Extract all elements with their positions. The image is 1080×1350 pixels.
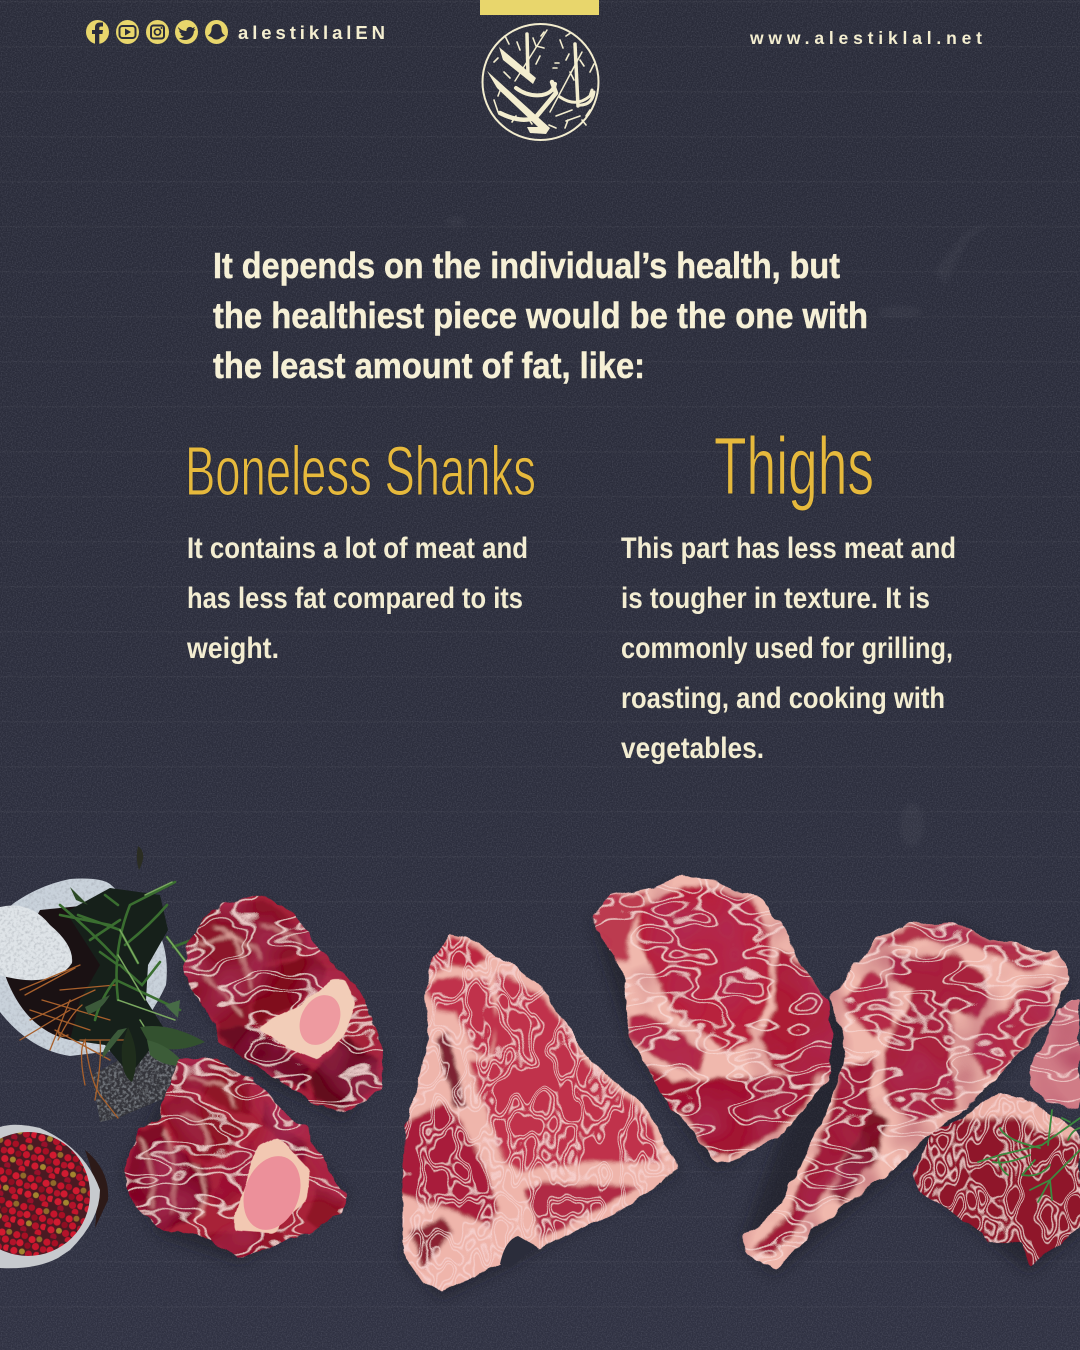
- icon: twitter: [175, 20, 198, 44]
- icon: instagram: [146, 20, 169, 44]
- social media icons: [86, 20, 228, 44]
- text block: boneless shanks description: It contains a lot of meat and: [187, 532, 528, 565]
- accent bar at top: [480, 0, 599, 15]
- photo: upper osso buco shank: [183, 895, 384, 1115]
- text block: boneless shanks description: weight.: [186, 632, 279, 665]
- text block: thighs description: is tougher in texture. It is: [621, 582, 930, 615]
- text block: boneless shanks description: [186, 532, 528, 665]
- marrow: [292, 988, 348, 1052]
- icon: snapchat: [205, 20, 228, 44]
- photo: t-bone steak: [403, 933, 679, 1293]
- intro heading: the healthiest piece would be the one with: [213, 295, 868, 336]
- photo: front steak at right edge: [912, 1092, 1080, 1267]
- heading: Boneless Shanks: Boneless Shanks: [185, 432, 536, 510]
- photo: pink peppercorn bowl: [0, 1125, 108, 1268]
- photo: sage leaves: [70, 846, 205, 1082]
- photo: mortar with pestle: [0, 879, 178, 1122]
- photo: tomahawk steak: [741, 922, 1070, 1270]
- pestle: [0, 905, 72, 980]
- intro heading: It depends on the individual’s health, but: [213, 245, 840, 286]
- heading: Thighs: Thighs: [714, 421, 874, 512]
- intro heading: the least amount of fat, like:: [213, 345, 645, 386]
- mortar bowl: [0, 879, 167, 1056]
- text block: thighs description: [621, 532, 956, 765]
- notch in bone: [500, 1236, 535, 1268]
- bone ring: [258, 980, 356, 1060]
- text block: boneless shanks description: has less fat compared to its: [187, 582, 523, 615]
- photo: herb sprigs: [20, 882, 205, 1118]
- logo emblem: [482, 24, 598, 140]
- social handle: alestiklalEN: [238, 22, 385, 43]
- text block: thighs description: This part has less meat and: [621, 532, 956, 565]
- website address: www.alestiklal.net: [749, 28, 982, 48]
- bone ring: [234, 1137, 310, 1233]
- photo: meat shadows: [124, 882, 1080, 1298]
- icon: facebook: [86, 20, 109, 44]
- photo: ribeye steak: [593, 877, 833, 1163]
- dark stone base: [92, 1045, 178, 1122]
- text block: thighs description: vegetables.: [621, 732, 764, 765]
- peppercorns: [0, 1132, 90, 1256]
- photo: rosemary sprig on steak: [978, 1110, 1080, 1202]
- photo: lower osso buco shank: [124, 1057, 348, 1257]
- text block: thighs description: roasting, and cooking with: [621, 682, 945, 715]
- marrow: [234, 1148, 310, 1238]
- photo: back steak at right edge: [1032, 997, 1080, 1110]
- text block: thighs description: commonly used for grilling,: [621, 632, 953, 665]
- intro heading: [213, 245, 868, 386]
- mortar interior: [5, 903, 140, 1040]
- herb dark mass: [66, 888, 168, 1075]
- bowl shadow: [85, 1150, 108, 1228]
- bowl rim: [0, 1125, 100, 1268]
- icon: youtube: [116, 20, 139, 44]
